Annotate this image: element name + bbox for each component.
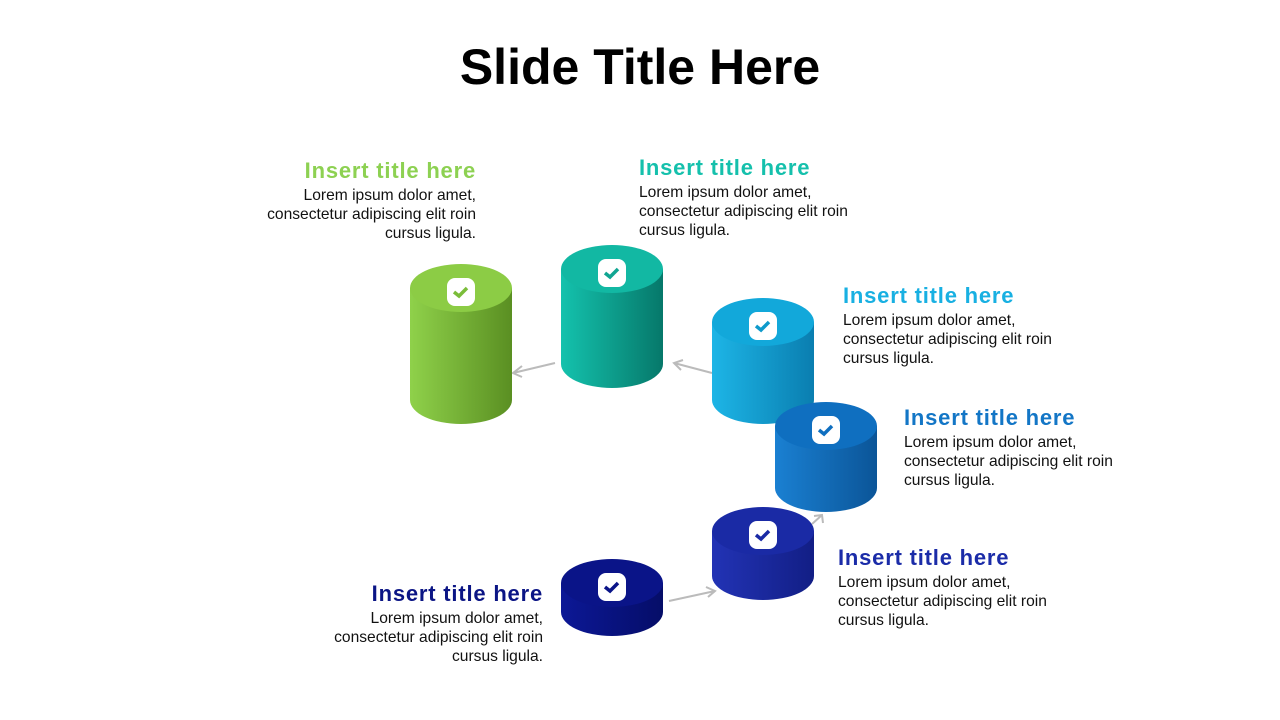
cylinder 1 green [410,264,512,424]
icon: check [598,573,626,601]
text block 6 [334,581,543,665]
text block 3: cursus ligula. [843,350,934,367]
cylinder 5 indigo [712,507,814,600]
text block 3 [843,283,1052,367]
text block 4: consectetur adipiscing elit roin [904,453,1113,470]
text block 4: cursus ligula. [904,472,995,489]
text block 5: cursus ligula. [838,612,929,629]
text block 2: cursus ligula. [639,222,730,239]
text block 2: consectetur adipiscing elit roin [639,203,848,220]
title: Slide Title Here [460,39,820,95]
text block 5: consectetur adipiscing elit roin [838,593,1047,610]
text block 6: cursus ligula. [452,648,543,665]
text block 1: Insert title here [305,158,476,183]
text block 6: Lorem ipsum dolor amet, [371,610,543,627]
text block 3: Insert title here [843,283,1014,308]
icon: check [447,278,475,306]
text block 5: Lorem ipsum dolor amet, [838,574,1010,591]
text block 1 [267,158,476,242]
text block 6: Insert title here [372,581,543,606]
text block 4 [904,405,1113,489]
text block 1: cursus ligula. [385,225,476,242]
cylinder 6 navy [561,559,663,636]
text block 5: Insert title here [838,545,1009,570]
text block 4: Lorem ipsum dolor amet, [904,434,1076,451]
icon: check [598,259,626,287]
cylinder 3 light blue [712,298,814,424]
text block 1: consectetur adipiscing elit roin [267,206,476,223]
cylinder 4 blue [775,402,877,512]
icon: check [749,521,777,549]
text block 2 [639,155,848,239]
text block 2: Insert title here [639,155,810,180]
icon: check [812,416,840,444]
icon: check [749,312,777,340]
text block 2: Lorem ipsum dolor amet, [639,184,811,201]
cylinder 2 teal [561,245,663,388]
text block 4: Insert title here [904,405,1075,430]
arrows [513,360,823,601]
text block 1: Lorem ipsum dolor amet, [304,187,476,204]
text block 5 [838,545,1047,629]
text block 3: Lorem ipsum dolor amet, [843,312,1015,329]
text block 3: consectetur adipiscing elit roin [843,331,1052,348]
text block 6: consectetur adipiscing elit roin [334,629,543,646]
